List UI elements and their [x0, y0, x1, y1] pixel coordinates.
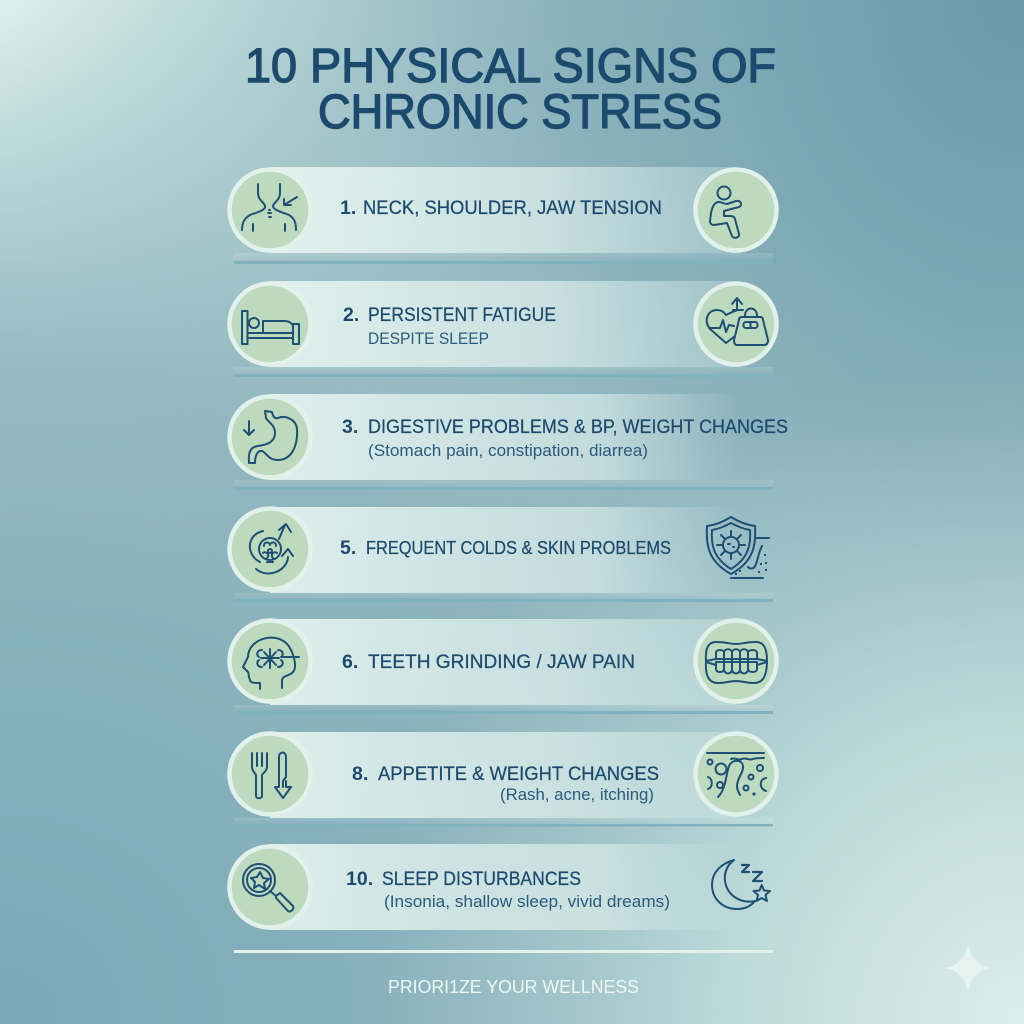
- icon: fork and knife arrow: [230, 734, 310, 814]
- label 10: SLEEP DISTURBANCES: [382, 869, 581, 890]
- panel: sign 2 persistent fatigue: [230, 281, 776, 377]
- label 3: 3.: [342, 416, 358, 438]
- panel: sign 3 digestive problems: [230, 394, 788, 490]
- icon: head with brain: [230, 620, 310, 702]
- label 2: PERSISTENT FATIGUE: [368, 305, 556, 326]
- label 5: FREQUENT COLDS & SKIN PROBLEMS: [366, 538, 671, 558]
- icon: moon, z's and star: [712, 860, 770, 909]
- label 10: [346, 868, 670, 911]
- icon: clenched teeth: [696, 620, 776, 702]
- label 8: [352, 763, 659, 804]
- panel: sign 10 sleep disturbances: [230, 844, 773, 953]
- label 5: 5.: [340, 537, 356, 559]
- icon: person in bed: [230, 284, 310, 364]
- label 6: TEETH GRINDING / JAW PAIN: [368, 652, 635, 673]
- label 1: NECK, SHOULDER, JAW TENSION: [363, 198, 662, 219]
- icon: magnifying glass: [230, 846, 310, 928]
- label 10: (Insonia, shallow sleep, vivid dreams): [384, 893, 670, 911]
- icon: immune cycle: [230, 508, 310, 590]
- panel: sign 6 teeth grinding: [230, 619, 776, 714]
- title: [245, 40, 776, 139]
- label 3: DIGESTIVE PROBLEMS & BP, WEIGHT CHANGES: [368, 417, 788, 438]
- icon: sparkle: [943, 943, 993, 993]
- label 8: (Rash, acne, itching): [500, 786, 654, 804]
- panel: sign 5 frequent colds and skin problems: [230, 507, 773, 602]
- label 8: 8.: [352, 763, 368, 785]
- label 8: APPETITE & WEIGHT CHANGES: [378, 764, 659, 785]
- label 1: 1.: [340, 197, 356, 219]
- panel: sign 8 appetite and weight changes: [230, 732, 776, 826]
- label 2: 2.: [343, 304, 359, 326]
- label 3: (Stomach pain, constipation, diarrea): [368, 442, 648, 460]
- label 6: 6.: [342, 651, 358, 673]
- title: 10 PHYSICAL SIGNS OF: [245, 40, 776, 93]
- panel: sign 1 neck, shoulder, jaw tension: [230, 167, 776, 264]
- icon: heart rate and weight: [696, 284, 776, 364]
- label 10: 10.: [346, 868, 373, 890]
- label 3: [342, 416, 788, 460]
- icon: neck and shoulders: [230, 170, 310, 250]
- footer text: PRIORI1ZE YOUR WELLNESS: [388, 977, 639, 997]
- label 2: DESPITE SLEEP: [368, 330, 489, 348]
- icon: stomach: [230, 396, 310, 478]
- icon: seated person: [696, 170, 776, 250]
- icon: skin conditions: [696, 734, 776, 814]
- title: CHRONIC STRESS: [318, 86, 722, 139]
- label 2: [343, 304, 556, 348]
- icon: shield with virus and skin: [707, 517, 769, 578]
